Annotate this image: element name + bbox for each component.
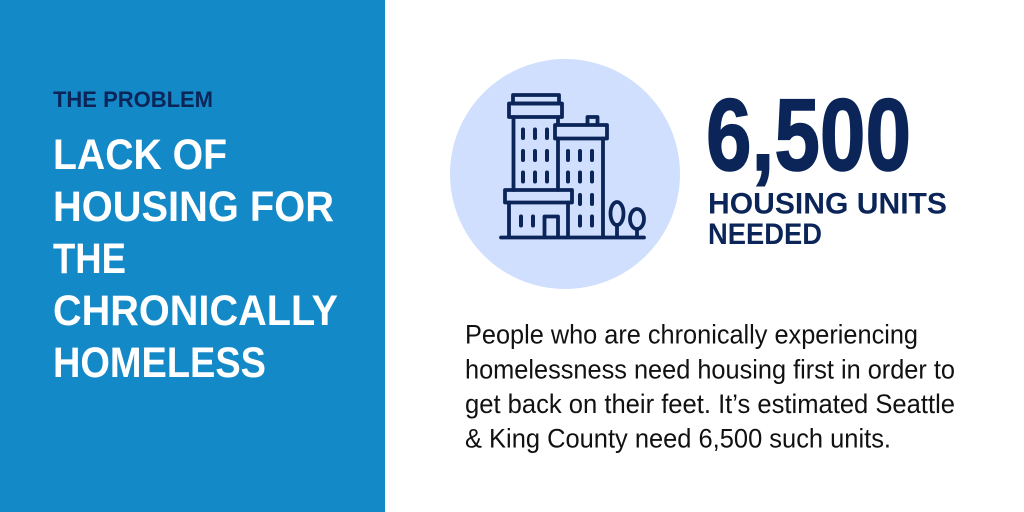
body text: People who are chronically experiencing bbox=[465, 320, 918, 350]
body text: homelessness need housing first in order to bbox=[465, 354, 955, 384]
statistic label: housing units needed: NEEDED bbox=[708, 218, 822, 251]
heading: lack of housing: HOMELESS bbox=[53, 340, 266, 387]
heading: lack of housing bbox=[53, 132, 338, 387]
body text: get back on their feet. It’s estimated Seattle bbox=[465, 389, 955, 419]
heading: lack of housing: HOUSING FOR bbox=[53, 184, 334, 231]
eyebrow: the problem: THE PROBLEM bbox=[53, 87, 213, 112]
body text: & King County need 6,500 such units. bbox=[465, 424, 891, 454]
statistic label: housing units needed: HOUSING UNITS bbox=[708, 188, 947, 220]
heading: lack of housing: LACK OF bbox=[53, 132, 227, 179]
statistic: 6,500: 6,500 bbox=[706, 78, 911, 192]
icon: buildings in circle bbox=[450, 59, 680, 289]
heading: lack of housing: CHRONICALLY bbox=[53, 288, 338, 335]
heading: lack of housing: THE bbox=[53, 236, 126, 283]
body text bbox=[465, 320, 955, 454]
panel: the problem bbox=[0, 0, 385, 512]
statistic label: housing units needed bbox=[708, 188, 947, 251]
